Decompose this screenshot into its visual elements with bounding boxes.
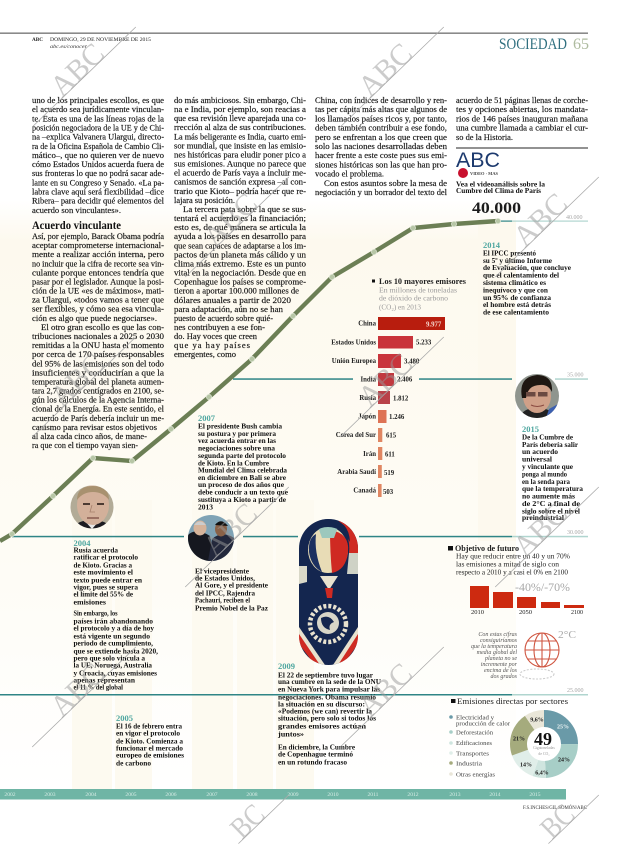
text column 3 <box>315 95 448 197</box>
ABC watermarks: ABC <box>44 657 111 723</box>
reduction bars: 2100 <box>571 610 583 616</box>
text column 1 continued: acuerdo de París debería incluir un me- <box>32 413 164 423</box>
values: 503 <box>383 489 394 496</box>
timeline year bar: 2012 <box>407 792 419 798</box>
text column 1 continued: tribuciones nacionales a 2025 o 2030 <box>32 331 164 341</box>
panel: 10 largest emitters bar chart <box>331 277 466 497</box>
heading: Acuerdo vinculante: Acuerdo vinculante <box>32 220 121 232</box>
text: 2015 event: en la senda para <box>522 478 570 486</box>
sector legend <box>449 714 511 778</box>
text: 2009 event: en un rotundo fracaso <box>278 758 347 766</box>
text: 2015 event: universal <box>522 456 552 464</box>
text: 2007 event: 2013 <box>198 504 213 512</box>
chart gridlines and scale labels <box>0 215 588 696</box>
timeline year bar: 2003 <box>44 792 56 798</box>
text column 2: trario que Kioto– podría hacer que re- <box>174 186 306 196</box>
text: 2007 event <box>198 413 288 512</box>
page header: ABC <box>32 37 43 43</box>
country labels: Irán <box>363 451 376 458</box>
bars <box>378 317 445 497</box>
photo: Hollande <box>515 374 559 418</box>
text column 1 continued: ra que con el tiempo vayan sien- <box>32 440 138 450</box>
italic note: dos grados <box>490 674 518 680</box>
text column 2: que esa revisión lleve aparejada una co- <box>174 113 306 123</box>
text: 2004 event: está vigente un segundo <box>74 632 150 640</box>
text: 2004 event: el 11 % del global <box>74 684 123 692</box>
values: 615 <box>386 432 397 440</box>
text column 1 continued: aceptar comprometerse internacional- <box>32 240 164 250</box>
italic note: que la temperatura <box>471 644 517 650</box>
text: 2004 event: el límite del 55% de <box>74 590 133 598</box>
text column 1: cómo Estados Unidos acuerda fuera de <box>32 159 164 169</box>
text column 1 continued: remitidas a la ONU hasta el momento <box>32 340 164 350</box>
text column 1: uno de los principales escollos, es que <box>32 95 164 105</box>
reduction range label: -40%/-70% <box>515 582 570 594</box>
text column 4: so de la Historia. <box>456 132 513 142</box>
page header: SOCIEDAD <box>499 36 567 53</box>
chart heading: (CO₂) en 2013 <box>379 304 422 312</box>
text column 2: que ya hay países <box>174 340 251 350</box>
ABC watermarks: ABC <box>352 37 419 103</box>
goal heading and text <box>448 544 570 576</box>
text column 1 continued: del 95% de las emisiones son del todo <box>32 358 164 368</box>
text column 3: pero se enfrentan a los que creen que <box>315 132 447 142</box>
text column 1 continued: culante porque entonces tendría que <box>32 267 164 277</box>
text column 2: ayuda a los países en desarrollo para <box>174 231 306 241</box>
text column 1: labra clave aquí será flexibilidad –dice <box>32 186 164 196</box>
text: 2009 event: 2009 <box>278 661 295 671</box>
italic note: media global del <box>477 650 517 656</box>
text column 4: acuerdo de 51 páginas llenas de corche- <box>456 95 588 105</box>
text column 2 <box>174 95 307 359</box>
text column 1 continued: ción de la UE «es de máximos», mati- <box>32 286 164 296</box>
text: Al Gore caption: Pachauri, reciben el <box>195 596 250 604</box>
photo: Al Gore and Pachauri <box>188 515 234 561</box>
timeline year bar: 2004 <box>85 792 97 798</box>
text: 2007 event: El presidente Bush cambia <box>198 422 282 430</box>
timeline year bar: 2010 <box>327 792 339 798</box>
donut chart: Gigatoneladas <box>533 746 555 750</box>
text: 2015 event: preindustrial <box>522 514 564 522</box>
text: 2007 event: de Kioto. En la Cumbre <box>198 459 269 467</box>
text: 2005 event: europeo de emisiones <box>116 752 184 760</box>
text: 2004 event: países irán abandonando <box>74 618 153 626</box>
text column 2: La más beligerante es India, cuarto emi- <box>174 131 306 141</box>
country labels: Japón <box>358 414 376 420</box>
text: 2004 event: de Kioto. Gracias a <box>74 562 132 570</box>
text: 2004 event: la UE, Noruega, Australia <box>74 662 152 670</box>
text column 1 continued: ción es algo que puede negociarse». <box>32 313 157 323</box>
country labels: Rusia <box>359 395 377 402</box>
text: 2009 event: una cumbre en la sede de la ONU <box>278 678 382 686</box>
text column 2: nes contribuyen a ese fon- <box>174 322 265 332</box>
text column 2: do más ambiciosos. Sin embargo, Chi- <box>174 95 306 105</box>
text: 2015 event <box>522 424 583 522</box>
timeline year bar: 2006 <box>165 792 177 798</box>
values: 611 <box>385 452 395 458</box>
text: 2007 event: su postura y por primera <box>198 430 276 438</box>
text: 2004 event: ratificar el protocolo <box>74 554 138 562</box>
text: 2007 event: Mundial del Clima celebrada <box>198 467 287 475</box>
text column 3: deben también contribuir a ese fondo, <box>315 123 447 133</box>
text: 2007 event: debe conducir a un texto que <box>198 488 288 496</box>
panel: direct emissions by sector <box>449 696 570 778</box>
text column 3: hacer frente a este coste pues sus emi- <box>315 150 447 160</box>
text column 2: tentará el acuerdo es la financiación; <box>174 213 306 223</box>
chart gridlines and scale labels: 30.000 <box>567 530 584 536</box>
text column 2: Copenhague los países se comprome- <box>174 277 306 287</box>
text: 2009 event: El 22 de septiembre tuvo lugar <box>278 672 374 680</box>
panel: ABC video promo: VIDEO · MAS <box>470 171 498 176</box>
donut chart: 25% <box>557 724 569 730</box>
timeline year bar: 2002 <box>4 792 16 798</box>
sector legend: Edificaciones <box>456 740 492 747</box>
text: 2015 event: ponga al mundo <box>522 470 567 478</box>
text: 2004 event: 2004 <box>74 538 91 548</box>
values: 9.977 <box>426 322 442 328</box>
text column 3: siones históricas son las que han pro- <box>315 159 447 169</box>
text column 1 continued: El otro gran escollo es que las con- <box>41 322 164 332</box>
chart heading: Los 10 mayores emisores <box>379 277 466 286</box>
text: 2009 event: situación, pero solo si todos los <box>278 714 376 722</box>
text column 1 continued: tara 2,7 grados centígrados en 2100, se- <box>32 386 164 396</box>
text column 1 continued: temperatura global del planeta aumen- <box>32 376 164 386</box>
donut chart: 21% <box>513 736 525 742</box>
text: 2014 event <box>483 240 571 317</box>
text: 2007 event: sustituya a Kioto a partir de <box>198 496 286 504</box>
text column 1 continued: canismo para revisar estos objetivos <box>32 422 158 432</box>
text: 2004 event: vigor, pues se supera <box>74 584 138 592</box>
text column 1: na –explica Valvanera Ulargui, directo- <box>32 132 164 142</box>
chart gridlines and scale labels: 35.000 <box>567 372 584 378</box>
text column 2: nes históricas para eludir poner pico a <box>174 150 306 160</box>
text column 1 <box>32 95 165 215</box>
text column 4: una cumbre llamada a cambiar el cur- <box>456 123 588 133</box>
text column 1 continued: pasar por el legislador. Aunque la posi- <box>32 276 164 286</box>
text: 2007 event: 2007 <box>198 413 216 423</box>
text column 1 continued: mente a realizar acción interna, pero <box>32 249 164 259</box>
text: 2014 event: su 5º y último Informe <box>483 257 552 265</box>
donut chart: 14% <box>520 762 532 768</box>
text column 1: sus fronteras lo que no podrá sacar ade- <box>32 168 164 178</box>
text column 1 continued: za Ulargui, «todos vamos a tener que <box>32 295 164 305</box>
text: 2014 event: el hombre está detrás <box>483 301 551 309</box>
reduction bars: 2050 <box>519 610 532 616</box>
icon: globe <box>520 633 559 679</box>
text column 2: sus emisiones. Aunque no parece que <box>174 159 306 169</box>
page header: 65 <box>573 36 589 53</box>
panel: ABC video promo: ABC <box>456 149 500 172</box>
donut chart: 9,6% <box>530 718 544 724</box>
text column 2: na e India, por ejemplo, son reacias a <box>174 104 306 114</box>
text column 1 continued: insuficientes y conducirían a que la <box>32 367 164 377</box>
goal heading and text: las emisiones a mitad de siglo con <box>456 560 559 568</box>
text: 2007 event: negociaciones sobre una <box>198 445 275 453</box>
text: 2004 event: y Croacia, cuyas emisiones <box>74 670 157 678</box>
country labels: Canadá <box>353 488 377 494</box>
line chart: emissions 2002-2014 <box>0 218 501 541</box>
donut chart: 49 <box>534 729 552 749</box>
text: 2014 event: de Evaluación, que concluye <box>483 264 571 272</box>
text: 2014 event: 2014 <box>483 240 501 250</box>
country labels: Estados Unidos <box>331 340 376 346</box>
ABC watermarks: ABC <box>197 497 264 563</box>
text: 2015 event: De la Cumbre de <box>522 434 573 442</box>
sector legend: Otras energías <box>456 772 495 778</box>
text: 2004 event: Rusia acuerda <box>74 546 118 554</box>
sector legend: Deforestación <box>456 730 494 736</box>
chart heading: de dióxido de carbono <box>379 294 449 302</box>
goal heading and text: respecto a 2010 y a casi el 0% en 2100 <box>456 568 568 576</box>
text column 1: Ribera– para decidir qué elementos del <box>32 196 165 206</box>
text column 3: tas per cápita más altas que algunos de <box>315 104 447 114</box>
text column 1 continued: al alza cada cinco años, de mane- <box>32 431 147 441</box>
text: 2005 event: 2005 <box>116 713 133 723</box>
text: 2015 event: y vinculante que <box>522 463 573 471</box>
text column 1: te. Esta es una de las líneas rojas de la <box>32 113 164 123</box>
text column 2: sor mundial, que insiste en las emisio- <box>174 140 306 150</box>
text: 2005 event <box>116 713 184 768</box>
text column 3: China, con índices de desarrollo y ren- <box>315 95 447 105</box>
text: Al Gore caption <box>195 568 269 612</box>
timeline year bar: 2013 <box>449 792 461 798</box>
italic note: Con estas cifras <box>478 631 518 638</box>
values: 2.406 <box>397 376 413 384</box>
text: 2009 event: la situación en su discurso: <box>278 700 365 708</box>
text: 2004 event: que se extiende hasta 2020, <box>74 648 158 656</box>
text column 1: acuerdo son vinculantes». <box>32 205 121 215</box>
text: 2007 event: vez acuerda entrar en las <box>198 437 276 445</box>
text: 2009 event: en Nueva York para impulsar las <box>278 686 380 694</box>
chart heading <box>372 277 466 312</box>
panel: ABC video promo <box>456 147 588 195</box>
sector legend: producción de calor <box>456 720 511 728</box>
country labels <box>331 320 377 494</box>
text column 3: solo las naciones desarrolladas deben <box>315 141 448 151</box>
ABC watermarks: ABC <box>507 497 574 563</box>
text: 2004 event: texto puede entrar en <box>74 576 142 584</box>
text: 2009 event: juntos» <box>277 730 304 738</box>
text: 2007 event: segunda parte del protocolo <box>198 452 286 460</box>
text: 2014 event: sistema climático es <box>483 279 546 287</box>
text column 4: tes y opciones abiertas, los mandata- <box>456 104 588 114</box>
text: 2005 event: El 16 de febrero entra <box>116 722 182 730</box>
text column 4: rios de 146 países inauguran mañana <box>456 113 588 123</box>
text: 2004 event: este movimiento el <box>74 568 133 576</box>
italic note <box>471 631 518 680</box>
text: 2009 event: negociaciones. Obama resumió <box>278 694 376 702</box>
text column 2: el acuerdo de París vaya a incluir me- <box>174 168 306 178</box>
text column 1: mático–, que no quieren ver de nuevo <box>32 150 164 160</box>
text column 3: Con estos asuntos sobre la mesa de <box>324 178 447 188</box>
values <box>383 322 442 496</box>
background: cream chart area <box>0 200 516 789</box>
sector legend: Electricidad y <box>456 714 495 722</box>
label: 2°C: 2°C <box>558 629 576 641</box>
text: 2009 event: En diciembre, la Cumbre <box>278 744 355 752</box>
timeline year bar: 2011 <box>368 792 379 798</box>
country labels: India <box>360 376 377 384</box>
timeline year bar: 2008 <box>246 792 258 798</box>
text: 2005 event: en vigor el protocolo <box>116 730 180 738</box>
text column 2: clima más extremo. Este es un punto <box>174 258 306 268</box>
text column 2: para adaptación, aún no se han <box>174 304 284 314</box>
italic note: encima de los <box>484 668 518 674</box>
reduction bars <box>470 586 584 616</box>
photo: Obama UN poster <box>299 519 358 665</box>
text: Al Gore caption: del IPCC, Rajendra <box>195 590 255 598</box>
text: 2014 event: que el calentamiento del <box>483 272 559 280</box>
italic note: incremente por <box>481 662 518 668</box>
photo: Putin <box>70 485 114 530</box>
credit: F.S.INCHES/GIL SOMÓN/ABC <box>523 805 588 811</box>
goal heading and text: Objetivo de futuro <box>455 544 519 553</box>
timeline year bar: 2009 <box>287 792 299 798</box>
country labels: Arabia Saudí <box>337 469 376 476</box>
timeline year bar <box>0 789 566 800</box>
text column 2: puesto de acuerdo sobre quié- <box>174 313 273 323</box>
timeline year bar: 2007 <box>206 792 218 798</box>
timeline year bar: 2005 <box>125 792 137 798</box>
values: 1.246 <box>389 414 405 421</box>
text column 2: rrección al alza de sus contribuciones. <box>174 122 306 132</box>
text: Al Gore caption: Premio Nobel de la Paz <box>195 604 269 612</box>
text column 3: vocado el problema. <box>315 169 384 179</box>
donut chart: 6,4% <box>535 770 549 776</box>
page header <box>0 32 589 53</box>
text column 2: esto es, de qué manera se articula la <box>174 222 306 232</box>
italic note: consiguiríamos <box>480 638 518 644</box>
text: 2014 event: de ese calentamiento <box>483 309 549 317</box>
text column 1 continued: Así, por ejemplo, Barack Obama podría <box>32 231 164 241</box>
ABC watermarks: BC <box>224 798 271 845</box>
ABC watermarks: BC <box>534 798 581 845</box>
text column 1 continued: ser flexibles, y cómo sea esa vincula- <box>32 304 164 314</box>
values: 1.812 <box>393 396 409 402</box>
text: 2015 event: no aumente más <box>522 493 575 501</box>
chart gridlines and scale labels: 40.000 <box>566 215 582 221</box>
panel: future goal <box>448 544 584 680</box>
text: 2015 event: un acuerdo <box>522 448 558 456</box>
text: 2014 event: un 95% de confianza <box>483 294 551 302</box>
text: Al Gore caption: de Estados Unidos, <box>195 574 255 582</box>
text: 2005 event: de Kioto. Comienza a <box>116 738 183 746</box>
reduction bars: 2010 <box>471 610 484 616</box>
sector heading: Emisiones directas por sectores <box>457 696 569 706</box>
text: 2009 event: grandes emisores actúan <box>278 722 366 730</box>
ABC watermarks: ABC <box>44 37 111 103</box>
text: Al Gore caption: Al Gore, y el presidente <box>195 582 268 590</box>
values: 5.233 <box>416 340 432 346</box>
text column 1: el acuerdo sea jurídicamente vinculan- <box>32 104 164 114</box>
text column 2: tieron a aportar 100.000 millones de <box>174 286 299 296</box>
text: 2014 event: El IPCC presentó <box>483 250 536 258</box>
text: 2009 event: «Podemos (we can) revertir la <box>278 708 372 716</box>
text column 1 continued: por cerca de 170 países responsables <box>32 349 165 359</box>
text: 2004 event: pero que solo vincula a <box>74 654 145 662</box>
text column 2: vital en la negociación. Desde que en <box>174 268 307 278</box>
goal heading and text: Hay que reducir entre un 40 y un 70% <box>456 552 570 560</box>
text column 2: pactos de un planeta más cálido y un <box>174 249 307 259</box>
sector legend: Industria <box>456 760 482 768</box>
panel: ABC video promo: Cumbre del Clima de París <box>456 187 541 195</box>
text: 2005 event: de carbono <box>116 760 151 768</box>
value: 40.000: 40.000 <box>472 200 521 217</box>
text: 2004 event: emisiones <box>74 598 106 606</box>
ABC watermarks: ABC <box>44 347 111 413</box>
chart heading: En millones de toneladas <box>379 286 457 294</box>
text: 2004 event: apenas representan <box>74 676 135 684</box>
ABC watermarks: ABC <box>352 347 419 413</box>
text: 2004 event: Sin embargo, los <box>74 610 118 618</box>
donut chart: de CO₂ <box>538 752 550 756</box>
italic note: planeta no se <box>484 656 517 662</box>
text: 2015 event: de 2°C a final de <box>522 500 580 508</box>
text: 2007 event: un proceso de dos años que <box>198 481 284 489</box>
page header: abc.es/conocer <box>50 44 88 50</box>
text: 2015 event: siglo sobre el nivel <box>522 507 580 515</box>
text: 2007 event: en diciembre en Bali se abre <box>198 474 286 482</box>
text: 2009 event <box>277 661 382 766</box>
country labels: Corea del Sur <box>336 432 376 439</box>
text column 2: canismos de sanción expresa –al con- <box>174 177 306 187</box>
country labels: Unión Europea <box>332 358 377 365</box>
values: 3.480 <box>404 358 420 366</box>
text: 2015 event: 2015 <box>522 424 539 434</box>
text column 1 continued: no incluir que la cifra de recorte sea vin- <box>32 258 164 268</box>
ABC watermarks: ABC <box>507 187 574 253</box>
text: 2009 event: de Copenhague terminó <box>278 750 353 758</box>
text: 2004 event <box>74 538 158 692</box>
text column 2: lajara su posición. <box>174 195 235 205</box>
text column 1: posición negociadora de la UE y de Chi- <box>32 122 164 132</box>
ABC watermarks: ABC <box>352 657 419 723</box>
text column 2: La tercera pata sobre la que se sus- <box>183 204 306 214</box>
page header: DOMINGO, 29 DE NOVIEMBRE DE 2015 <box>50 37 151 43</box>
text column 3: los llamados países ricos y, por tanto, <box>315 113 447 123</box>
country labels: China <box>358 320 377 328</box>
panel: ABC video promo: Vea el videoanálisis sobre la <box>456 180 545 188</box>
text column 2: emergentes, como <box>174 349 236 359</box>
text column 4 <box>456 95 588 142</box>
sector legend: Transportes <box>456 750 489 758</box>
text column 1 continued: gún los cálculos de la Agencia Interna- <box>32 395 164 405</box>
text column 2: dólares anuales a partir de 2020 <box>174 295 291 305</box>
text: 2004 event: periodo de cumplimiento, <box>74 640 153 648</box>
ABC watermarks: ABC <box>197 187 264 253</box>
text: 2004 event: el protocolo y a día de hoy <box>74 624 154 632</box>
text column 3: negociación y un borrador del texto del <box>315 187 448 197</box>
timeline year bar: 2015 <box>529 792 541 798</box>
text: 2015 event: París debería salir <box>522 441 579 449</box>
values: 519 <box>384 470 395 477</box>
timeline year bar: 2014 <box>489 792 501 798</box>
text column 1 continued <box>32 231 165 450</box>
text: 2014 event: inequívoco y que con <box>483 286 548 294</box>
donut chart: 24% <box>558 758 570 764</box>
text column 2: do. Hay voces que creen <box>174 331 258 341</box>
text column 1 continued: cional de la Energía. En este sentido, el <box>32 404 165 414</box>
text: 2005 event: funcionar el mercado <box>116 744 183 752</box>
text: Al Gore caption: El vicepresidente <box>195 568 249 576</box>
chart gridlines and scale labels: 25.000 <box>567 688 584 694</box>
text column 1: lante en su Congreso y Senado. «La pa- <box>32 177 164 187</box>
text column 2: que sean capaces de adaptarse a los im- <box>174 240 306 250</box>
text: 2015 event: que la temperatura <box>522 485 583 493</box>
donut chart <box>513 718 570 776</box>
text column 1: ra de la Oficina Española de Cambio Cli- <box>32 141 164 151</box>
